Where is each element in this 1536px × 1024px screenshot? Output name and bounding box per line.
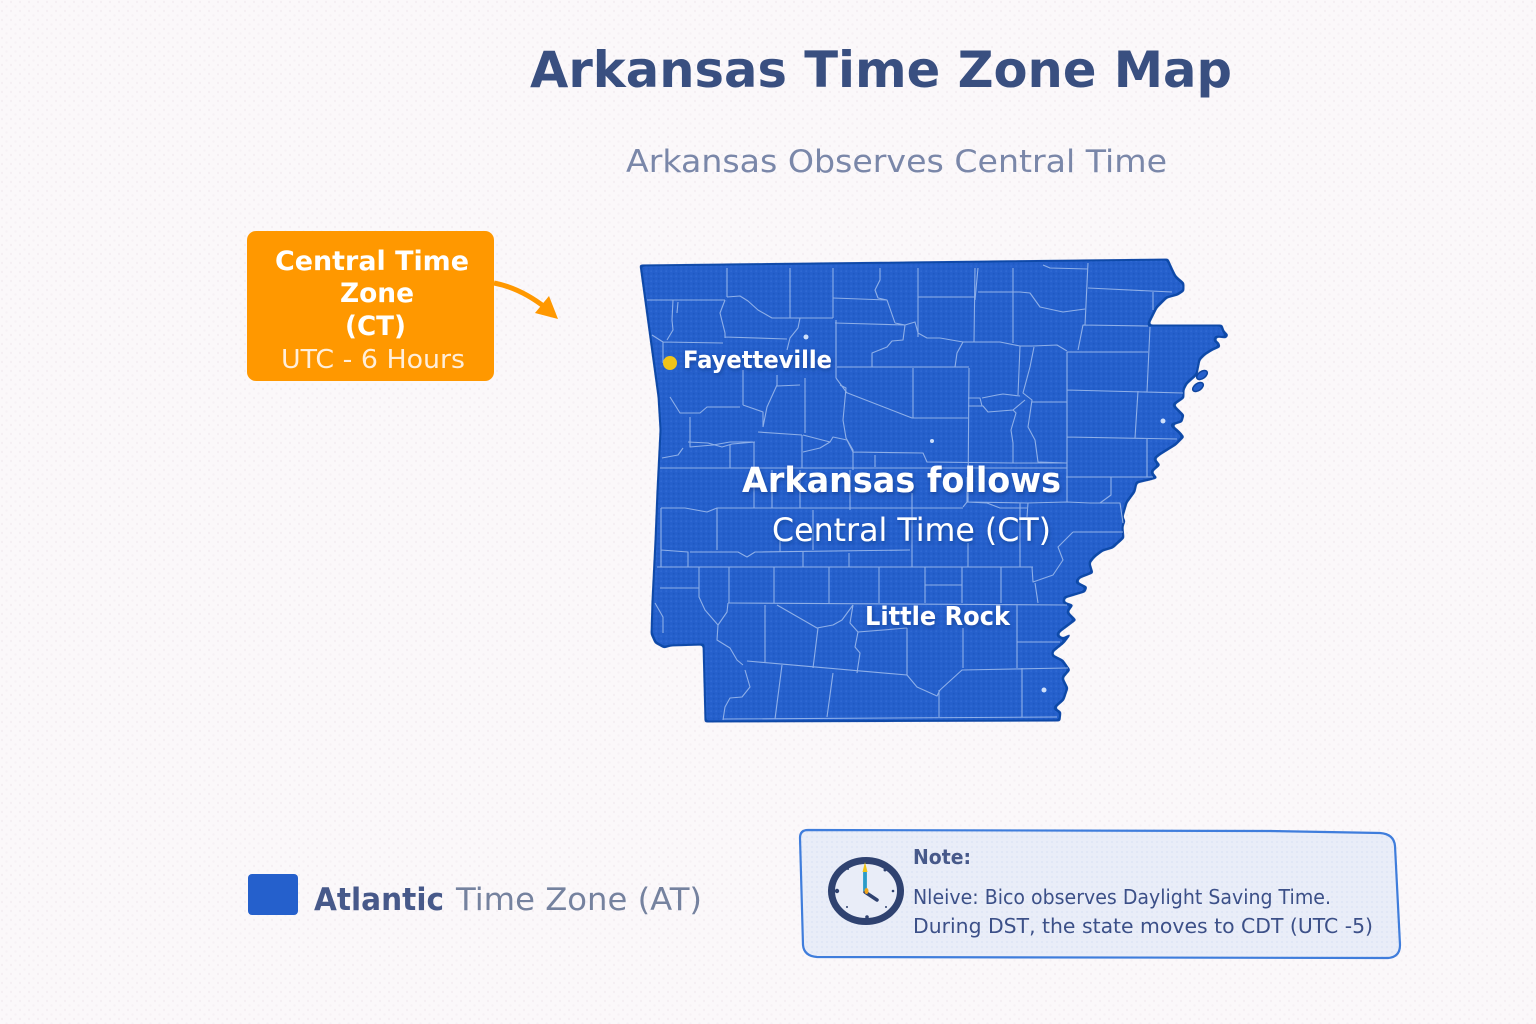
callout heading: Zone xyxy=(340,278,414,309)
note heading: Note: xyxy=(913,845,971,869)
note panel xyxy=(800,830,1400,958)
map heading: Arkansas follows xyxy=(742,461,1061,501)
Fayetteville label: Fayetteville xyxy=(683,346,832,374)
callout UTC offset: UTC - 6 Hours xyxy=(281,345,465,375)
title: Arkansas Time Zone Map xyxy=(530,41,1232,99)
river islands xyxy=(1191,369,1209,393)
county lines xyxy=(647,263,1183,720)
Little Rock label: Little Rock xyxy=(865,602,1011,632)
map: Arkansas xyxy=(640,258,1228,723)
legend swatch xyxy=(248,874,298,915)
callout heading: (CT) xyxy=(345,311,406,342)
note text xyxy=(913,885,1373,938)
legend label: Time Zone (AT) xyxy=(455,882,702,918)
icon: clock xyxy=(832,860,900,922)
state shape xyxy=(640,258,1228,723)
subtitle: Arkansas Observes Central Time xyxy=(626,144,1167,180)
legend label xyxy=(314,882,702,918)
callout: central time zone xyxy=(247,231,494,381)
city dots xyxy=(804,334,1166,692)
arrow: callout to map xyxy=(494,283,558,319)
callout heading: Central Time xyxy=(275,246,469,277)
callout heading xyxy=(275,246,469,342)
Fayetteville marker xyxy=(663,356,677,370)
legend xyxy=(248,874,702,918)
note text: Nleive: Bico observes Daylight Saving Time. xyxy=(913,885,1331,909)
map subheading: Central Time (CT) xyxy=(772,511,1051,549)
note text: During DST, the state moves to CDT (UTC -5) xyxy=(913,914,1373,938)
legend label: Atlantic xyxy=(314,882,444,918)
